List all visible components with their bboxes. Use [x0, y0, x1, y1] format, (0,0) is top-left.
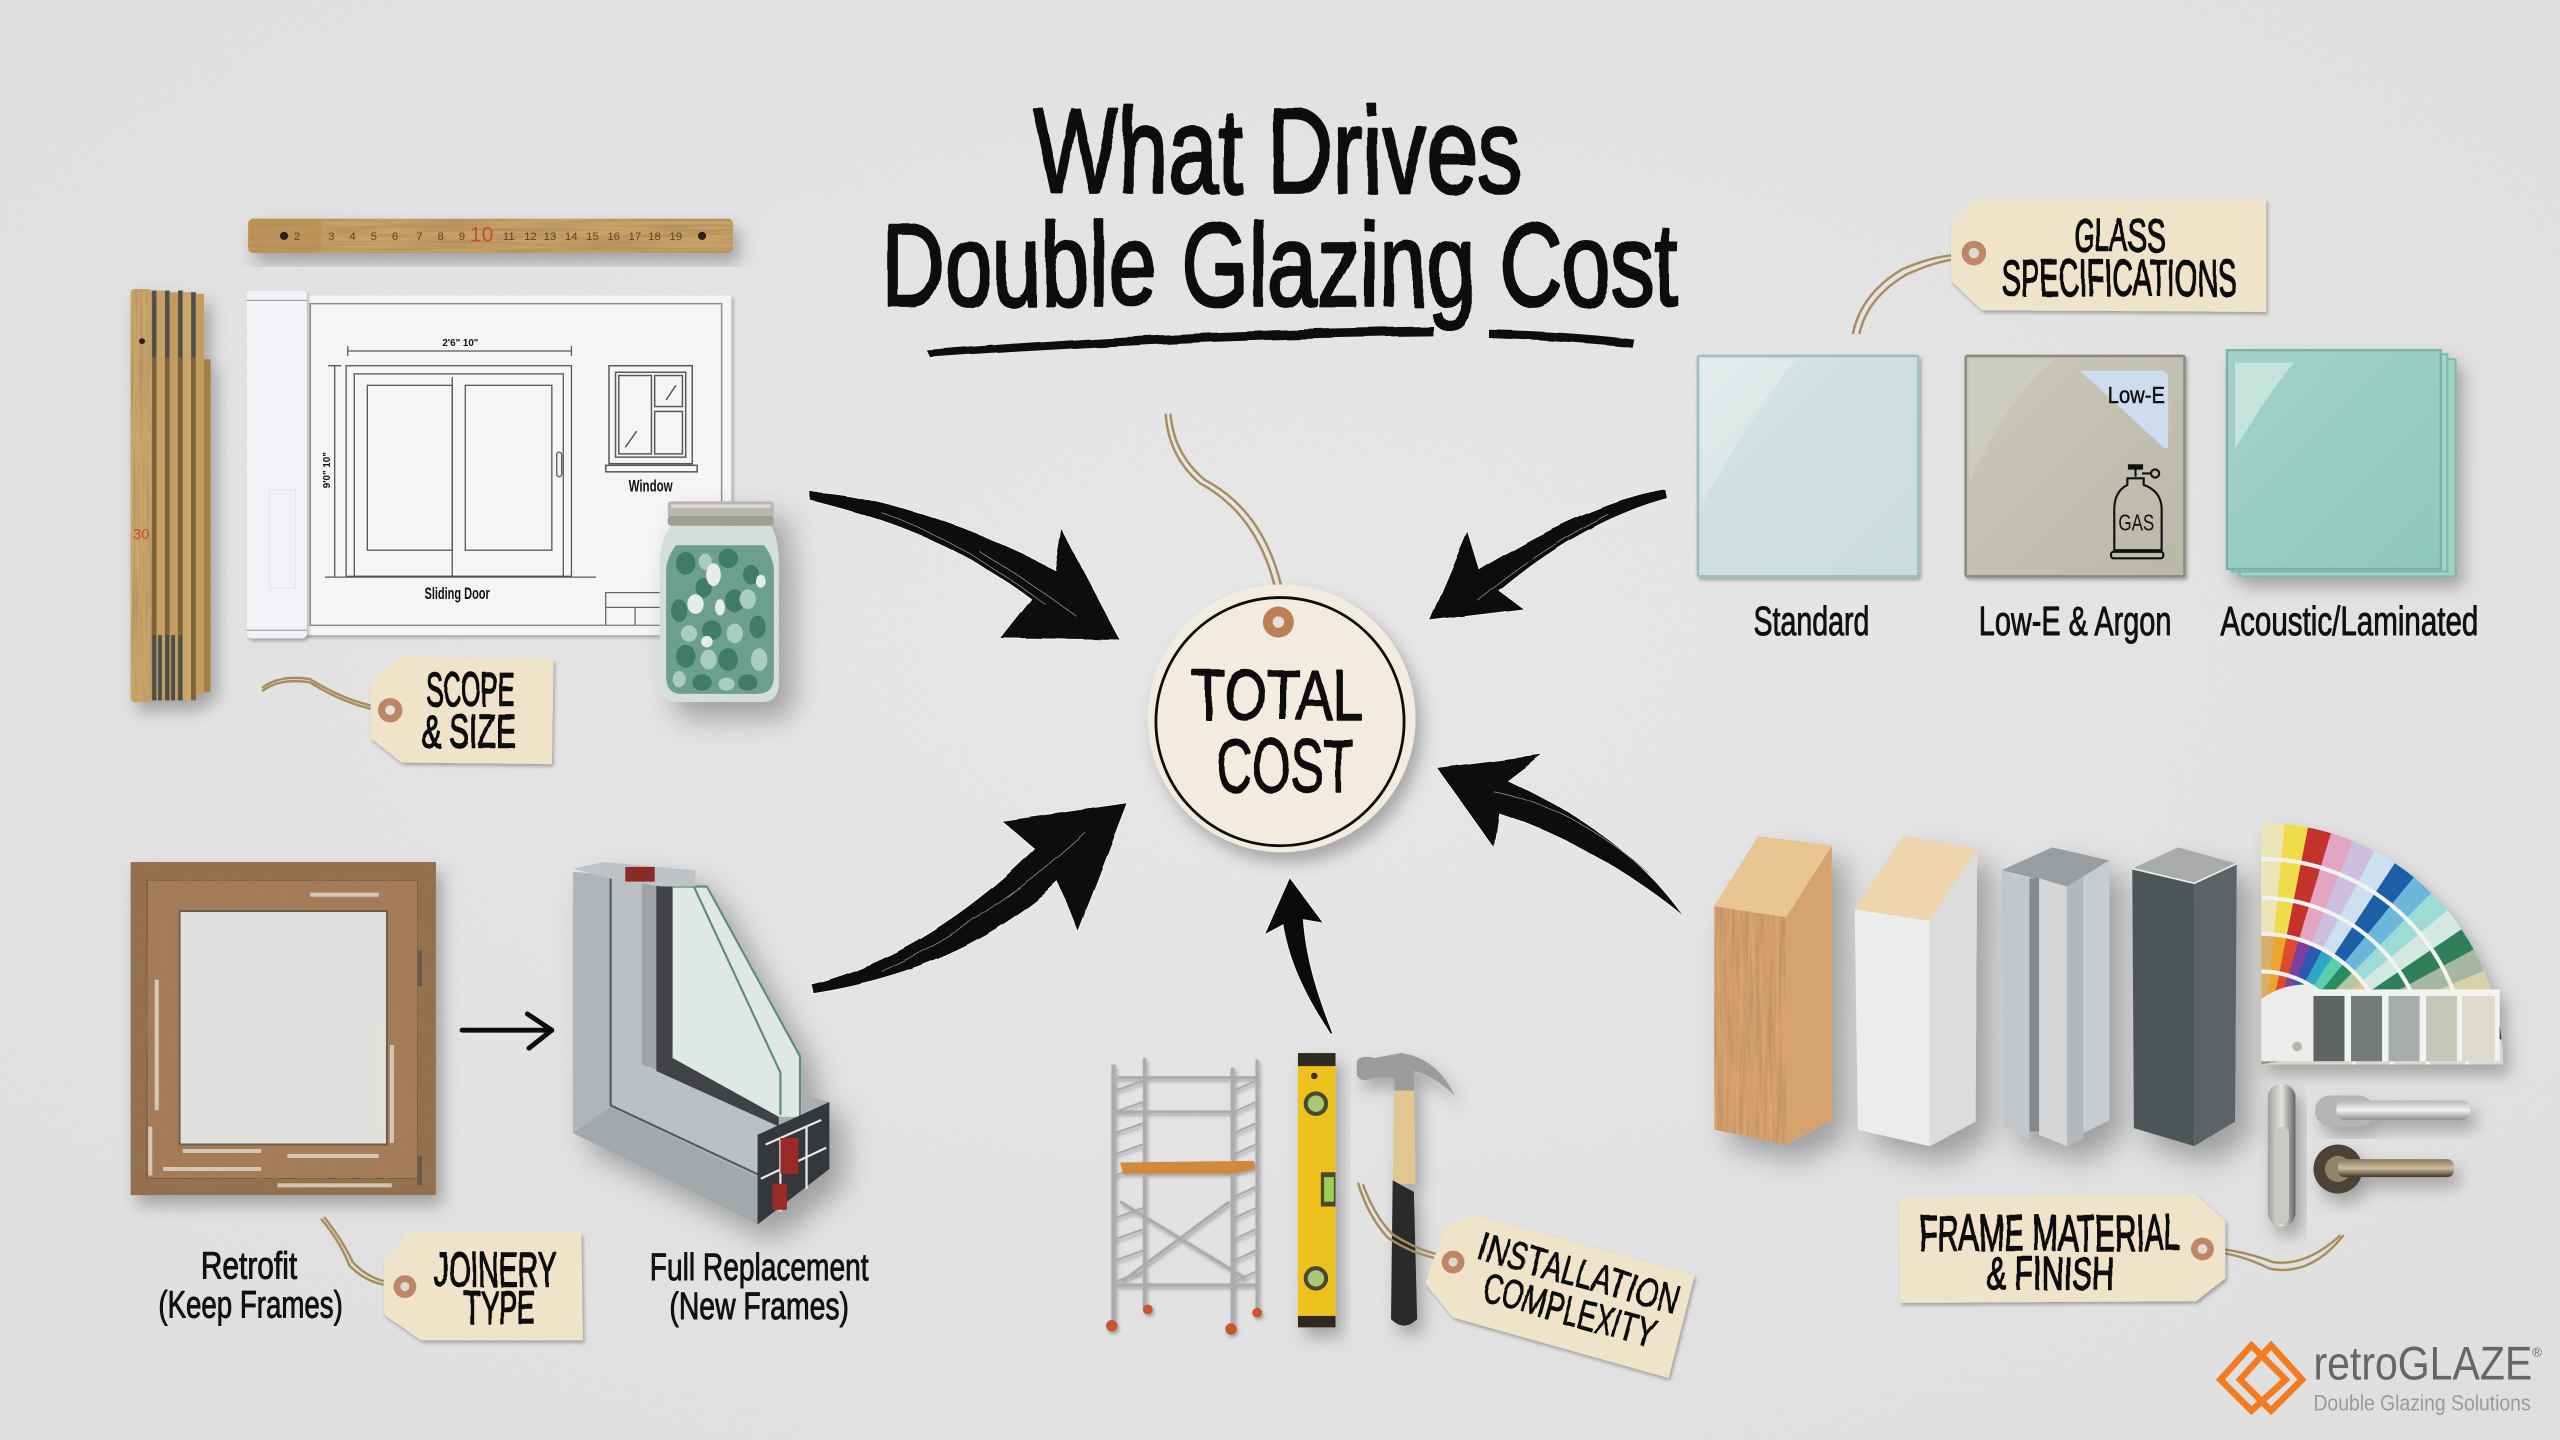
- tag: glass specifications: [1951, 199, 2266, 312]
- panel: frame material and finish: [1714, 787, 2539, 1303]
- low-e coating corner: [2080, 371, 2168, 448]
- centre tag: total cost: [1148, 415, 1416, 852]
- dimension height: 9'0" 10": [322, 452, 333, 488]
- icon: silver lever handle: [2315, 1096, 2470, 1127]
- arrow: scope to total: [810, 491, 1120, 640]
- arrow: frame to total: [1437, 754, 1683, 916]
- icon: straight folding ruler: 5: [371, 231, 377, 243]
- window drawing: [606, 366, 697, 472]
- tag: glass specifications: GLASS: [2073, 209, 2165, 262]
- logo: retroGLAZE: [2220, 1338, 2542, 1416]
- glass: standard: [1698, 356, 1918, 576]
- icon: spirit level: [1298, 1053, 1336, 1327]
- title: Double Glazing Cost: [882, 199, 1678, 330]
- label: sliding door: Sliding Door: [424, 585, 490, 603]
- total cost text: COST: [1216, 724, 1353, 808]
- icon: straight folding ruler: 12: [524, 231, 537, 243]
- icon: straight folding ruler: 18: [648, 231, 661, 243]
- tag: joinery type: TYPE: [464, 1282, 536, 1335]
- blueprint roll: [247, 291, 307, 638]
- centre tag body: [1148, 584, 1416, 852]
- tag: frame material and finish: & FINISH: [1987, 1248, 2114, 1301]
- string: scope tag: [263, 678, 385, 712]
- blueprint sheet: [305, 296, 731, 635]
- label: retrofit: Retrofit: [201, 1244, 298, 1286]
- glass: acoustic laminated: [2227, 350, 2456, 576]
- icon: straight folding ruler: [248, 219, 733, 253]
- icon: straight folding ruler: 17: [629, 231, 641, 243]
- arrow: joinery to total: [811, 803, 1127, 993]
- fan row separators: [2261, 856, 2469, 1064]
- title: What Drives: [1033, 84, 1522, 219]
- tag: glass specifications: SPECIFICATIONS: [2002, 250, 2237, 307]
- title block: [606, 593, 660, 625]
- icon: scaffold tower: [1106, 1058, 1262, 1335]
- icon: folded ruler: 30: [133, 527, 149, 543]
- icon: straight folding ruler: 4: [349, 231, 356, 243]
- icon: straight folding ruler: 7: [416, 231, 423, 243]
- icon: straight folding ruler: 11: [503, 231, 515, 243]
- tag: scope and size: [371, 656, 553, 764]
- aluminium profile: [2002, 847, 2109, 1146]
- label: keep frames: (Keep Frames): [158, 1284, 343, 1326]
- icon: vertical window handle: [2268, 1084, 2296, 1226]
- arrow: glass to total: [1430, 490, 1667, 620]
- total cost text: TOTAL: [1192, 656, 1363, 736]
- sliding door drawing: [325, 346, 596, 577]
- icon: straight folding ruler: 15: [586, 231, 599, 243]
- icon: straight folding ruler: 14: [565, 231, 578, 243]
- icon: gas bottle: GAS: [2118, 510, 2154, 536]
- tag: installation complexity: [1425, 1215, 1695, 1378]
- blueprint: [247, 291, 731, 638]
- inner colour wedges: [2261, 934, 2366, 1064]
- cutaway end section: [758, 1102, 829, 1224]
- icon: window frame cutaway: [573, 862, 829, 1224]
- icon: straight folding ruler: 16: [607, 231, 620, 243]
- icon: hammer: [1357, 1053, 1455, 1326]
- icon: straight folding ruler: 10: [470, 224, 493, 247]
- title: [882, 84, 1678, 358]
- total cost text: [1192, 656, 1363, 808]
- panel: installation complexity: [1106, 1053, 1695, 1378]
- icon: bronze lever handle: [2313, 1144, 2454, 1193]
- string: glass tag: [1853, 255, 1971, 333]
- label: low-e and argon: Low-E & Argon: [1979, 598, 2171, 644]
- logo wordmark: retroGLAZE: [2313, 1338, 2532, 1391]
- colour swatch fan: [2259, 823, 2518, 1083]
- dimension width: 2'6" 10": [442, 338, 478, 349]
- label: full replacement: Full Replacement: [650, 1246, 869, 1288]
- registered mark: ®: [2532, 1345, 2542, 1360]
- panel: scope and size: [131, 219, 779, 764]
- panel: joinery type: [131, 862, 869, 1340]
- tag: scope and size: SCOPE: [426, 663, 514, 716]
- panel: glass specifications: [1698, 199, 2478, 644]
- low-e text: Low-E: [2108, 382, 2165, 408]
- logo tagline: Double Glazing Solutions: [2313, 1391, 2531, 1416]
- icon: straight folding ruler: 19: [669, 231, 682, 243]
- icon: straight folding ruler: 8: [438, 231, 444, 243]
- icon: straight folding ruler: 2: [294, 231, 300, 243]
- outer colour wedges: [2261, 823, 2503, 1064]
- tag: frame material and finish: [1899, 1195, 2225, 1303]
- arrow: retrofit to replacement: [462, 1014, 552, 1048]
- label: standard: Standard: [1753, 598, 1869, 644]
- tag: installation complexity: COMPLEXITY: [1478, 1265, 1661, 1356]
- icon: straight folding ruler: 6: [392, 231, 398, 243]
- tag: frame material and finish: FRAME MATERIAL: [1918, 1205, 2181, 1262]
- icon: straight folding ruler: 13: [544, 231, 556, 243]
- string: installation tag: [1358, 1184, 1450, 1260]
- icon: folded ruler: [131, 289, 211, 702]
- string: frame tag: [2207, 1236, 2343, 1270]
- anthracite profile: [2132, 847, 2237, 1146]
- white painted profile: [1855, 836, 1977, 1146]
- icon: old timber window frame: [131, 862, 436, 1195]
- logo icon: [2220, 1345, 2302, 1411]
- glass: low-e and argon: [1966, 356, 2184, 576]
- string: joinery tag: [322, 1218, 402, 1287]
- label: window: Window: [629, 477, 673, 495]
- icon: gas bottle: [2111, 465, 2163, 558]
- tag: installation complexity: INSTALLATION: [1474, 1223, 1685, 1323]
- icon: jar of glass beads: [660, 501, 779, 702]
- label: new frames: (New Frames): [669, 1285, 849, 1327]
- icon: straight folding ruler: 9: [459, 231, 465, 243]
- arrow: installation to total: [1265, 878, 1332, 1033]
- icon: straight folding ruler: 3: [328, 231, 335, 243]
- centre tag string: [1166, 415, 1282, 617]
- tag: scope and size: & SIZE: [421, 706, 516, 759]
- tag: joinery type: JOINERY: [434, 1244, 557, 1298]
- timber profile: [1714, 836, 1832, 1144]
- tag: joinery type: [384, 1233, 583, 1340]
